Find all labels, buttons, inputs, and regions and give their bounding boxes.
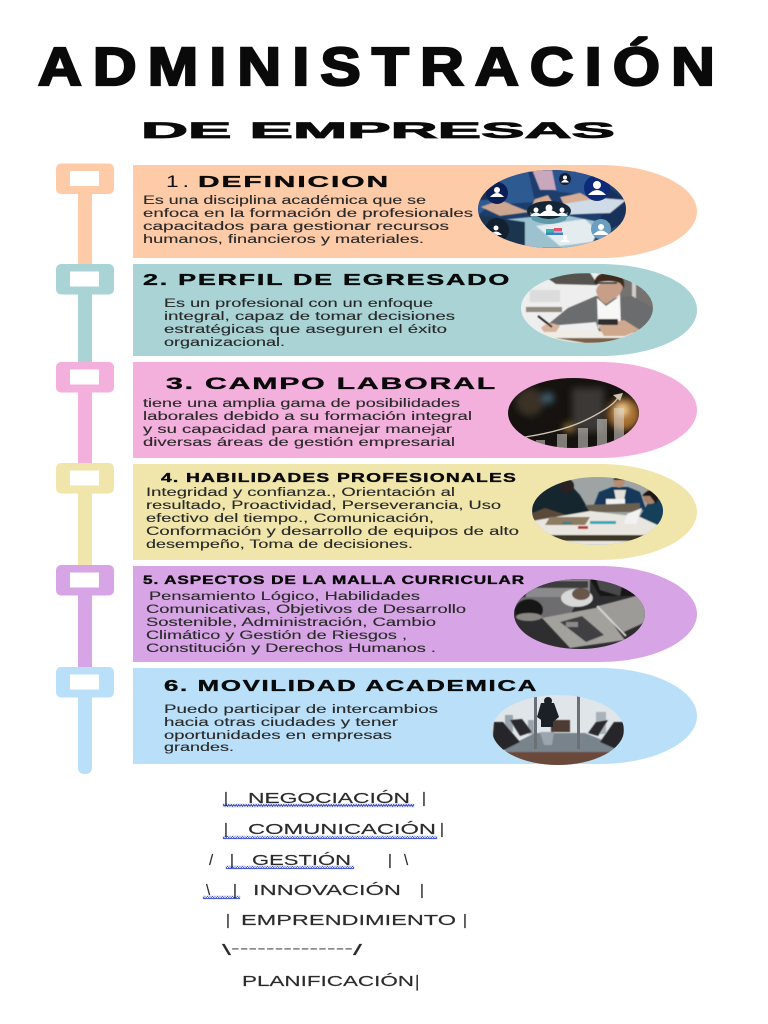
text block: definicion: capacitados para gestionar recursos [143,221,449,233]
text block: campo laboral: diversas áreas de gestión empresarial [143,437,455,449]
text block: bottom word list: | [233,882,237,899]
text block: bottom word list: EMPRENDIMIENTO [241,912,456,929]
timeline marker 1 [56,164,114,266]
panel: perfil de egresado [133,264,697,356]
text block: bottom word list: \ [222,942,233,959]
timeline [56,164,114,774]
photo: boardroom [492,695,624,766]
text block: bottom word list: / [353,942,364,959]
text block: aspectos de la malla curricular: Pensamiento Lógico, Habilidades [149,591,420,603]
text block: bottom word list: | [224,790,228,807]
text block: bottom word list: COMUNICACIÓN [248,821,436,838]
text block: definicion: Es una disciplina académica que se [143,195,426,207]
text block: bottom word list: | [224,821,228,838]
text block: habilidades profesionales: efectivo del tiempo., Comunicación, [146,513,434,525]
text block: bottom word list: | [230,852,234,869]
text block: definicion [143,195,473,246]
photo: business network [478,170,626,248]
panel: movilidad academica [133,668,697,766]
timeline marker 2 [56,264,114,364]
text block: campo laboral: laborales debido a su formación integral [143,411,472,423]
text block: habilidades profesionales: desempeño, Toma de decisiones. [146,539,413,551]
heading: campo laboral: 3. CAMPO LABORAL [166,374,497,393]
photo: growth chart [508,378,640,448]
text block: definicion: humanos, financieros y materiales. [143,234,424,246]
panel: campo laboral [133,362,697,458]
text block: bottom word list: -------------- [231,940,353,957]
panel: aspectos de la malla curricular [133,566,697,662]
text block: movilidad academica: hacia otras ciudades y tener [164,717,398,729]
timeline marker 4 [56,463,114,567]
text block: movilidad academica: oportunidades en empresas [164,730,392,742]
photo: team meeting [528,476,664,545]
text block: bottom word list: | [415,972,419,991]
text block: bottom word list: / [209,852,214,869]
text block: campo laboral: y su capacidad para manejar manejar [143,424,452,436]
text block: perfil de egresado: organizacional. [164,337,285,349]
text block: habilidades profesionales [146,487,519,551]
text block: perfil de egresado [164,298,455,349]
text block: bottom word list: | [388,852,392,869]
text block: perfil de egresado: integral, capaz de tomar decisiones [164,311,455,323]
panel: habilidades profesionales [133,464,697,560]
subtitle: DE EMPRESAS [141,118,615,143]
text block: definicion: enfoca en la formación de profesionales [143,208,473,220]
text block: aspectos de la malla curricular: Sostenible, Administración, Cambio [146,617,436,629]
text block: movilidad academica [164,704,438,754]
text block: aspectos de la malla curricular: Comunicativas, Objetivos de Desarrollo [146,604,466,616]
text block: campo laboral [143,398,472,449]
heading: habilidades profesionales: 4. HABILIDADES PROFESIONALES [161,470,517,485]
text block: bottom word list: \ [206,882,211,899]
text block: bottom word list: NEGOCIACIÓN [248,790,410,807]
heading: movilidad academica: 6. MOVILIDAD ACADEMICA [164,678,538,695]
title: ADMINISTRACIÓN [38,37,726,97]
photo: man working at desk [521,272,656,343]
text block: habilidades profesionales: resultado, Proactividad, Perseverancia, Uso [146,500,501,512]
text block: bottom word list: PLANIFICACIÓN [242,973,414,990]
text block: bottom word list: | [422,790,426,807]
heading: perfil de egresado: 2. PERFIL DE EGRESADO [143,272,511,289]
heading number: definicion: 1. [166,172,193,191]
panel: definicion [133,165,697,258]
text block: bottom word list [203,790,467,991]
text block: habilidades profesionales: Conformación y desarrollo de equipos de alto [146,526,519,538]
text block: movilidad academica: Puedo participar de intercambios [164,704,438,716]
heading: aspectos de la malla curricular: 5. ASPECTOS DE LA MALLA CURRICULAR [143,575,525,587]
heading text: definicion: DEFINICION [198,174,390,191]
text block: bottom word list: | [226,912,230,929]
text block: aspectos de la malla curricular: Constitución y Derechos Humanos . [146,643,436,655]
text block: aspectos de la malla curricular [146,591,466,655]
timeline marker 6 [56,667,114,774]
text block: bottom word list: GESTIÓN [252,852,351,869]
text block: bottom word list: | [420,882,424,899]
text block: perfil de egresado: Es un profesional con un enfoque [164,298,433,310]
photo: desk with calculator [514,579,650,649]
text block: bottom word list: \ [404,852,409,869]
timeline marker 5 [56,565,114,669]
text block: perfil de egresado: estratégicas que aseguren el éxito [164,324,447,336]
text block: movilidad academica: grandes. [164,742,234,754]
text block: bottom word list: | [440,821,444,838]
icon: central team [527,201,571,224]
timeline marker 3 [56,362,114,465]
text block: bottom word list: | [463,912,467,929]
text block: aspectos de la malla curricular: Climático y Gestión de Riesgos , [146,630,407,642]
text block: habilidades profesionales: Integridad y confianza., Orientación al [146,487,455,499]
text block: campo laboral: tiene una amplia gama de posibilidades [143,398,460,410]
text block: bottom word list: INNOVACIÓN [253,882,401,899]
